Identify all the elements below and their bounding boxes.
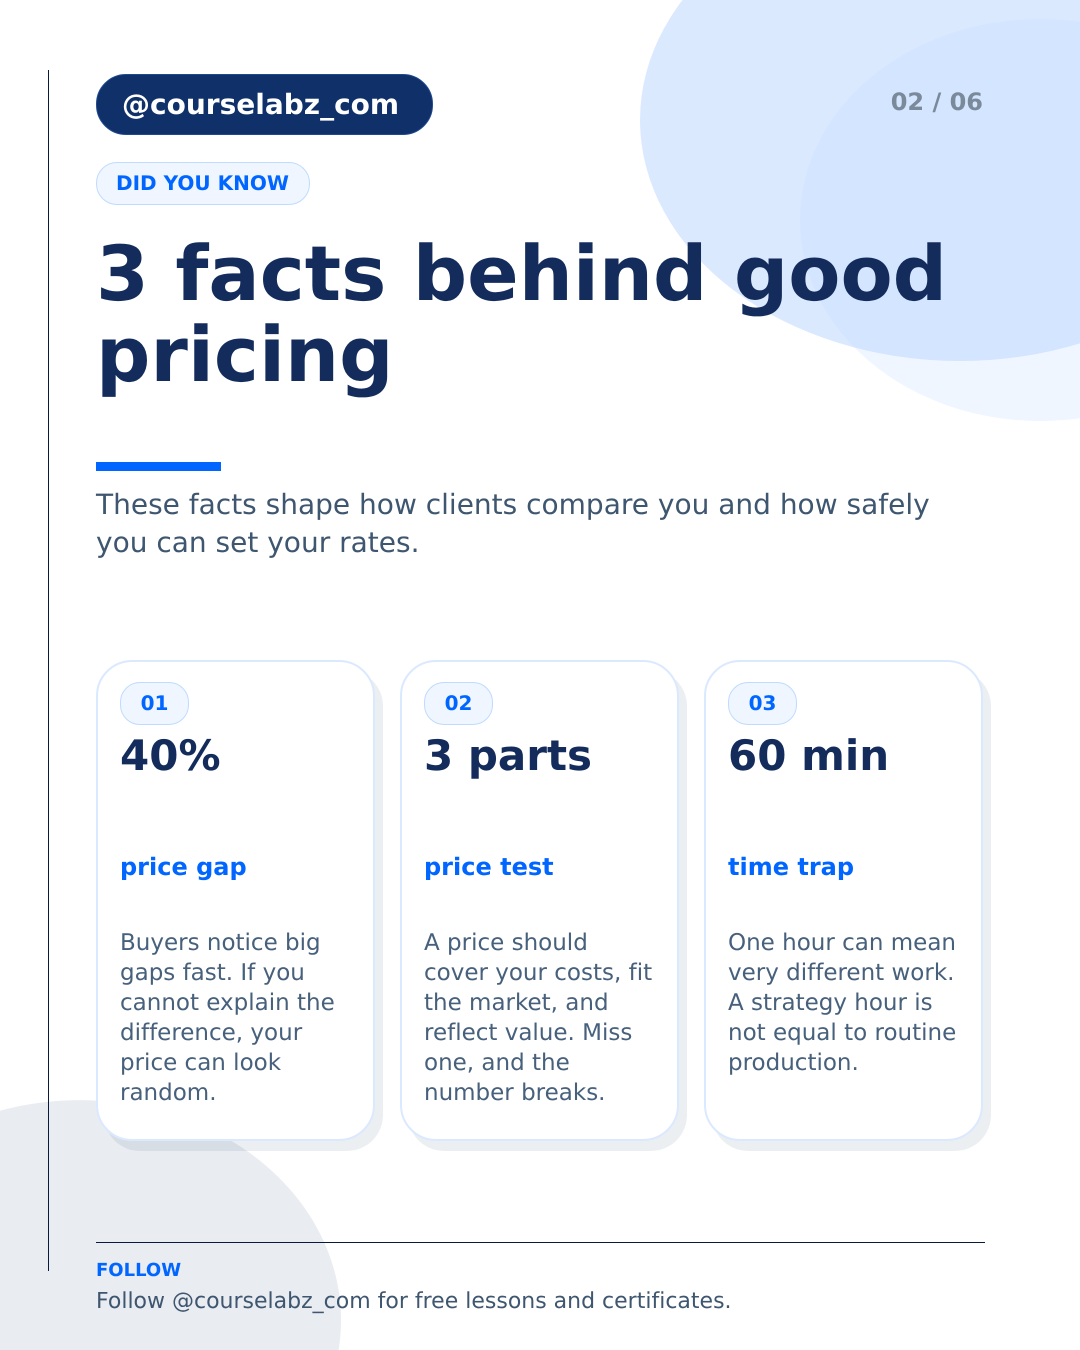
label: time trap: time trap	[728, 853, 854, 881]
description 03	[728, 930, 956, 1076]
title: pricing	[96, 310, 394, 399]
badge 01	[120, 682, 189, 725]
page number: 02 / 06	[891, 88, 983, 116]
description 01: random.	[120, 1080, 217, 1106]
background blob: pale blue overlay	[800, 19, 1080, 421]
intro text	[96, 488, 930, 559]
label: price gap: price gap	[120, 853, 247, 881]
description 01: difference, your	[120, 1020, 302, 1046]
description 03: very different work.	[728, 960, 954, 986]
description 03: production.	[728, 1050, 859, 1076]
description 02: the market, and	[424, 990, 609, 1016]
background blob: large blue	[640, 0, 1080, 361]
badge 02	[424, 682, 493, 725]
panel: fact 03	[704, 660, 983, 1141]
eyebrow tag	[96, 162, 310, 205]
badge 03	[728, 682, 797, 725]
panel: fact 01	[96, 660, 375, 1141]
title: 3 facts behind good	[96, 229, 947, 318]
description 01: Buyers notice big	[120, 930, 321, 956]
description 02: A price should	[424, 930, 588, 956]
intro text: you can set your rates.	[96, 526, 419, 559]
stat 60 min: 60 min	[728, 731, 889, 780]
eyebrow tag: DID YOU KNOW	[116, 171, 289, 195]
footer text: Follow @courselabz_com for free lessons and certificates.	[96, 1289, 732, 1314]
accent bar	[96, 462, 221, 471]
description 01: gaps fast. If you	[120, 960, 305, 986]
badge 01: 01	[141, 691, 168, 715]
description 01: cannot explain the	[120, 990, 335, 1016]
vertical rule	[48, 70, 49, 1271]
description 02	[424, 930, 652, 1106]
badge 02: 02	[445, 691, 472, 715]
panel: fact 02	[400, 660, 679, 1141]
handle pill	[96, 74, 433, 135]
footer label: FOLLOW	[96, 1260, 181, 1281]
description 03: not equal to routine	[728, 1020, 956, 1046]
handle pill: @courselabz_com	[122, 88, 399, 121]
description 02: number breaks.	[424, 1080, 605, 1106]
description 02: reflect value. Miss	[424, 1020, 632, 1046]
description 01: price can look	[120, 1050, 281, 1076]
description 02: cover your costs, fit	[424, 960, 652, 986]
description 03: A strategy hour is	[728, 990, 933, 1016]
description 01	[120, 930, 335, 1106]
label: price test: price test	[424, 853, 554, 881]
description 03: One hour can mean	[728, 930, 956, 956]
title	[96, 229, 947, 399]
background blob: grey bottom left	[0, 1100, 341, 1350]
footer rule	[96, 1242, 985, 1243]
intro text: These facts shape how clients compare you and how safely	[96, 488, 930, 521]
badge 03: 03	[749, 691, 776, 715]
stat 3 parts: 3 parts	[424, 731, 592, 780]
stat 40%: 40%	[120, 731, 221, 780]
description 02: one, and the	[424, 1050, 570, 1076]
